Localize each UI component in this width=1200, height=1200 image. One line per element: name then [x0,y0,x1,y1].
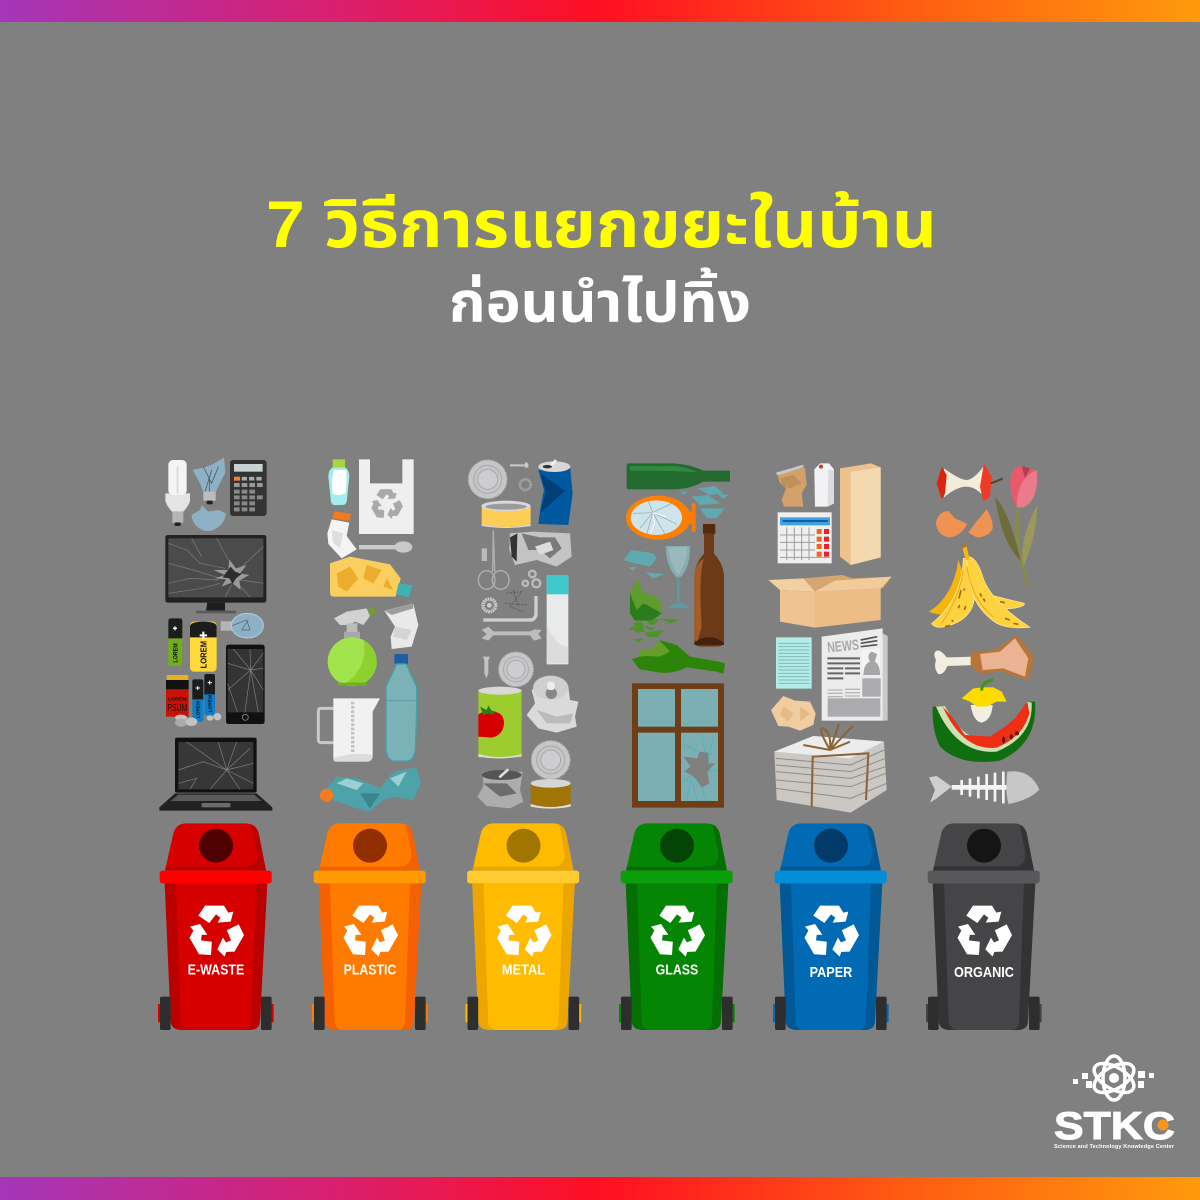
icon: glass shards [680,486,728,518]
icon: broken bulb [193,457,225,504]
bin: metal [465,823,581,1030]
icon: broken glass dome [192,505,226,531]
icon: 9V battery: LOREM [168,697,187,702]
icon: broken window [632,683,724,808]
icon: brown bottle [694,524,724,647]
icon: blue batteries [192,674,215,722]
icon: metal scraps [505,590,528,612]
icon: cardboard box [768,575,892,628]
icon: paper stack [774,724,887,813]
icon: tin lid [499,652,533,686]
icon: tuna tin [481,501,531,528]
icon: apple core [937,463,1003,502]
icon: 9V battery: PSUM [167,703,187,714]
icon: milk carton [814,463,834,507]
icon: allen key [483,596,536,620]
column: plastic items [318,459,421,812]
column: glass items [623,463,730,808]
top gradient bar [0,0,1200,22]
column: e-waste items [159,457,272,811]
icon: pepper core [962,680,1007,723]
logo tagline: Science and Technology Knowledge Center [1054,1144,1175,1150]
icon: newspaper: NEWS [827,638,860,656]
icon: small gear [520,479,531,490]
bin: e-waste [158,823,274,1030]
logo mark: atom [1073,1056,1154,1100]
icon: hand mirror [626,496,696,540]
icon: blue batteries: LOREM [208,695,214,712]
icon: calculator [230,460,267,516]
icon: gear [483,599,496,612]
icon: wrench [482,627,542,641]
logo: STKC [1054,1056,1175,1150]
icon: broken monitor [165,535,266,613]
icon: fish bone [929,771,1039,804]
icon: green bottle [627,463,730,489]
icon: crushed PET bottle [320,767,421,812]
icon: crumpled paper [771,696,816,731]
icon: crushed aluminium can [527,676,578,733]
column: organic items [929,463,1039,804]
icon: scissors [478,531,509,589]
bin: organic [926,823,1042,1030]
icon: broken lying bottle [632,640,725,674]
icon: light bulb [221,613,263,638]
column: paper items [768,463,892,813]
icon: glass shards [623,550,664,578]
icon: crushed cup [384,603,418,649]
icon: tin lid [532,741,570,779]
icon: paper bag [840,463,881,565]
icon: spray can [547,575,568,664]
icon: crushed can [509,532,572,567]
icon: green battery: LOREM [172,643,179,663]
icon: yellow battery [190,622,217,672]
bin: glass [619,823,735,1030]
icon: broken laptop [159,738,272,811]
icon: button cells [175,713,221,727]
icon: CFL lamp [165,460,190,526]
subtitle: ก่อนนำไปทิ้ง [449,266,751,334]
icon: lotion bottle [328,459,349,505]
icon: yellow battery: LOREM [199,641,209,668]
bin: glass: GLASS [656,962,698,978]
icon: tin lid [469,460,507,498]
bin: e-waste: E-WASTE [188,962,244,978]
icon: PET bottle [386,654,417,761]
logo dot [1158,1120,1168,1130]
icon: crushed paper cup [776,465,807,507]
icon: broken green bottle [630,578,662,621]
icon: note pad [776,637,812,689]
title: 7 วิธีการแยกขยะในบ้าน [266,187,937,261]
icon: spoon [359,541,412,553]
bin: metal: METAL [502,962,545,978]
bin: paper: PAPER [810,965,853,981]
icon: crushed steel can [477,769,523,808]
icon: green battery [168,618,182,666]
icon: wine glass [666,546,690,608]
icon: green shards [628,618,680,643]
icon: blue can [538,460,573,525]
icon: banana peel [929,544,1030,628]
icon: plastic bag [359,459,414,534]
icon: newspaper [822,628,888,721]
column: metal items [469,460,578,809]
icon: crushed yellow bottle [330,557,413,597]
icon: spray bottle [328,606,377,686]
bin: plastic [312,823,428,1030]
icon: broken phone [226,645,265,724]
icon: screw [510,462,528,468]
icon: crushed white bottle [327,511,357,558]
icon: egg shells [936,509,993,537]
icon: screw [483,657,490,678]
icon: watermelon rind [933,702,1035,762]
icon: calendar [778,512,832,563]
icon: chicken bone [934,635,1034,680]
icon: small screw [482,548,487,561]
logo wordmark: STKC [1054,1105,1175,1148]
bin: paper [773,823,889,1030]
icon: 9V battery [166,675,189,717]
icon: tulip [995,466,1037,587]
bottom gradient bar [0,1177,1200,1200]
icon: blue batteries: LOREM [196,701,202,718]
icon: brown tin [531,779,571,809]
bin: organic: ORGANIC [954,965,1014,981]
bin: plastic: PLASTIC [344,962,396,978]
icon: tomato can [478,687,522,759]
icon: nuts [523,571,540,587]
icon: measuring jug [318,698,380,762]
